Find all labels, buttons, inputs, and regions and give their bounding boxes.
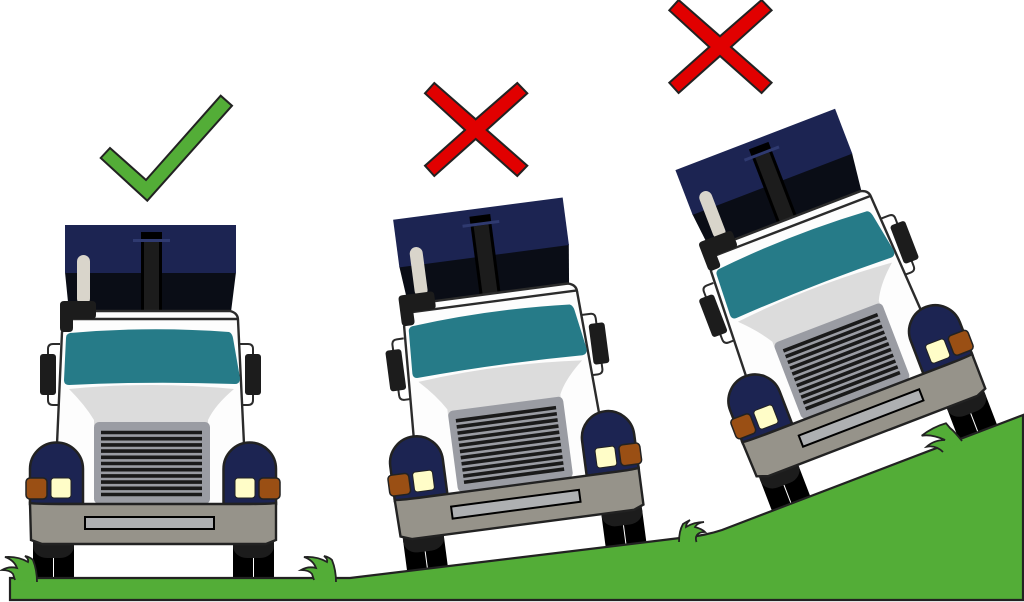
windshield <box>712 205 896 320</box>
air horn <box>409 246 428 298</box>
grass tuft 1 <box>2 556 37 582</box>
fender left <box>721 367 792 443</box>
cab body <box>57 311 244 504</box>
roof clamp <box>698 230 743 272</box>
mirror left <box>40 354 56 395</box>
exhaust stack <box>741 139 805 227</box>
bumper <box>30 503 276 544</box>
fender left <box>387 433 447 501</box>
tires <box>402 503 648 586</box>
lights left <box>730 404 779 440</box>
air horn <box>77 255 90 305</box>
mirror brackets <box>702 214 915 344</box>
grass tuft 2 <box>301 556 336 582</box>
dump body load <box>65 225 236 312</box>
bumper plate <box>451 490 581 519</box>
mirror brackets <box>392 313 603 400</box>
grass tuft 3 <box>679 520 705 542</box>
exhaust stack <box>461 213 509 297</box>
mirror right <box>890 220 919 264</box>
bumper <box>742 354 987 480</box>
lights left <box>387 470 435 497</box>
grille <box>773 302 911 420</box>
lights right <box>235 478 280 499</box>
lights right <box>595 443 642 469</box>
dump body load <box>675 109 866 251</box>
mirror brackets <box>48 344 253 405</box>
truck on flat ground <box>26 225 280 590</box>
fender right <box>901 298 972 374</box>
bumper plate <box>85 517 214 529</box>
mirror right <box>588 322 610 365</box>
windshield <box>64 329 240 385</box>
fender right <box>224 443 276 504</box>
roof line <box>72 318 238 320</box>
air horn <box>697 189 727 240</box>
hood <box>418 356 587 419</box>
tires <box>33 538 274 590</box>
mirror left <box>385 349 406 392</box>
grille <box>94 422 210 504</box>
check mark <box>101 96 232 201</box>
hood <box>69 385 234 426</box>
ground slope <box>10 415 1023 600</box>
cross mark top right <box>669 0 772 93</box>
windshield <box>406 300 588 379</box>
tires <box>758 387 1001 522</box>
lights left <box>26 478 71 499</box>
dump body load <box>393 197 574 306</box>
mirror left <box>698 294 728 338</box>
cross mark middle <box>425 83 527 176</box>
grille <box>448 396 573 493</box>
truck on steep slope <box>639 93 1007 525</box>
roof clamp <box>60 301 96 332</box>
bumper <box>395 468 644 541</box>
mirror right <box>245 354 261 395</box>
roof line <box>716 196 871 255</box>
fender right <box>579 408 639 476</box>
cab body <box>396 282 607 497</box>
lights right <box>925 329 974 365</box>
bumper plate <box>799 389 923 447</box>
roof line <box>412 290 577 312</box>
cab body <box>699 186 943 433</box>
truck on moderate slope <box>354 192 654 587</box>
fender left <box>30 443 83 504</box>
hood <box>736 259 905 356</box>
grass tuft 4 <box>922 423 962 452</box>
exhaust stack <box>133 232 170 312</box>
roof clamp <box>398 291 438 327</box>
